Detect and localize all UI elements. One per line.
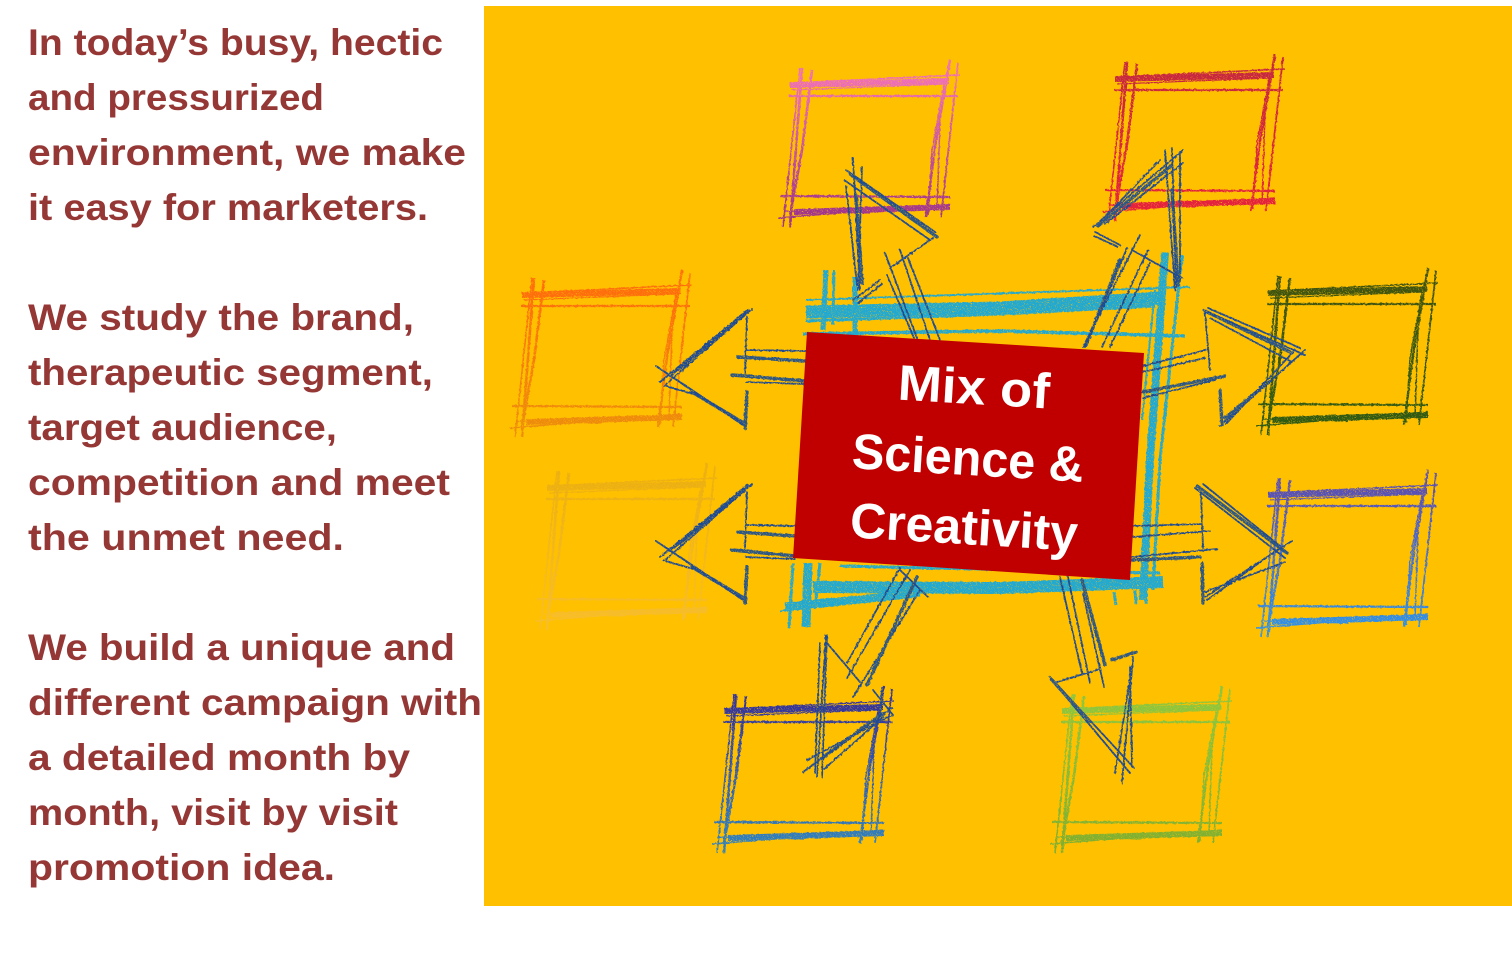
box: orange: [510, 270, 692, 437]
arrow: upper right: [1083, 148, 1183, 347]
label text: Creativity: [849, 492, 1080, 562]
arrow: middle right lower: [1132, 484, 1292, 603]
paragraph: unique campaign: promotion idea.: [28, 847, 335, 888]
paragraph: brand study: We study the brand,: [28, 297, 414, 338]
paragraph: brand study: competition and meet: [28, 462, 450, 503]
panel: orange diagram background: [484, 6, 1512, 906]
paragraph: busy environment: [28, 22, 466, 228]
arrow: lower left: [803, 568, 928, 777]
paragraph: brand study: therapeutic segment,: [28, 352, 433, 393]
box: faint yellow: [535, 463, 717, 630]
box: olive green: [1256, 268, 1438, 435]
central red label: [793, 332, 1144, 580]
arrow: middle left lower: [656, 484, 795, 603]
box: red: [1103, 54, 1285, 221]
paragraph: brand study: [28, 297, 450, 558]
paragraph: brand study: the unmet need.: [28, 517, 344, 558]
paragraph: unique campaign: a detailed month by: [28, 737, 410, 778]
box: pink: [778, 60, 960, 227]
label text: [849, 355, 1085, 562]
paragraph: unique campaign: [28, 627, 482, 888]
central cyan sketched box: [780, 252, 1190, 628]
paragraph: busy environment: environment, we make: [28, 132, 466, 173]
box: navy blue: [712, 686, 894, 853]
diagram: sketched boxes and arrows: [510, 54, 1438, 853]
label text: Science &: [851, 423, 1085, 493]
paragraph: unique campaign: different campaign with: [28, 682, 482, 723]
paragraph: busy environment: In today’s busy, hectic: [28, 22, 443, 63]
paragraph: unique campaign: We build a unique and: [28, 627, 455, 668]
label text: Mix of: [896, 355, 1052, 420]
arrow: lower right: [1050, 577, 1136, 783]
arrow: upper left: [844, 158, 940, 340]
left text column: [28, 22, 482, 888]
paragraph: busy environment: and pressurized: [28, 77, 324, 118]
paragraph: brand study: target audience,: [28, 407, 337, 448]
arrow: middle right upper: [1143, 308, 1305, 426]
box: lime green: [1050, 686, 1232, 853]
paragraph: busy environment: it easy for marketers.: [28, 187, 428, 228]
box: periwinkle blue: [1256, 470, 1438, 637]
arrow: middle left upper: [656, 309, 806, 428]
paragraph: unique campaign: month, visit by visit: [28, 792, 398, 833]
